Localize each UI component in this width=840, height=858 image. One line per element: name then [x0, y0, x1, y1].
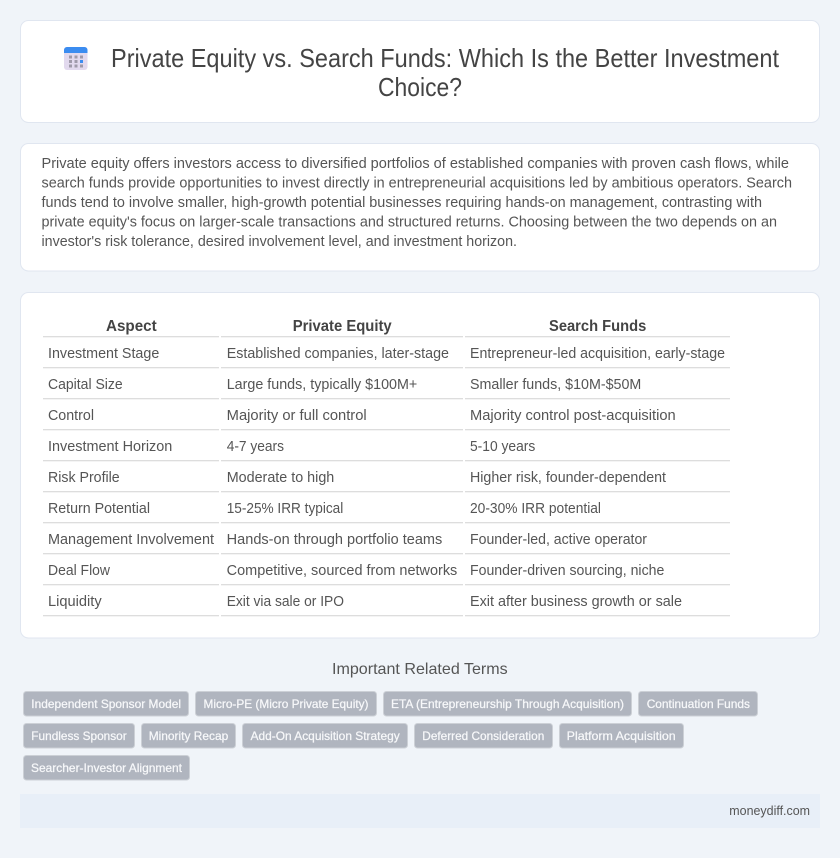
table row: capital size: Capital Size: [48, 377, 123, 393]
tag: fundless sponsor: [24, 724, 134, 748]
panel: title header: [20, 20, 820, 122]
table header row: [43, 318, 730, 337]
table row: investment stage: [43, 346, 730, 368]
footer: [20, 794, 820, 828]
table row: control: Control: [48, 408, 94, 424]
table row: investment stage: Established companies, later-stage: [227, 346, 449, 362]
table row: risk profile: Risk Profile: [48, 470, 120, 486]
tag: independent sponsor model: Independent Sponsor Model: [31, 697, 181, 711]
tag: fundless sponsor: Fundless Sponsor: [31, 729, 127, 743]
tag: add-on acquisition strategy: Add-On Acquisition Strategy: [250, 729, 400, 743]
icon: calendar: [64, 47, 88, 70]
table row: liquidity: Liquidity: [48, 594, 103, 610]
text block: introduction paragraph: search funds provide opportunities to invest directly in entrepreneurial acquisitions led by ambitious operators. Search: [42, 176, 792, 192]
tag: searcher-investor alignment: Searcher-Investor Alignment: [31, 761, 183, 775]
table row: investment horizon: [43, 439, 730, 461]
table row: investment stage: Investment Stage: [48, 346, 159, 362]
tag: platform acquisition: [560, 724, 684, 748]
table row: risk profile: [43, 470, 730, 492]
table row: investment horizon: 4-7 years: [227, 439, 284, 455]
table row: deal flow: Founder-driven sourcing, niche: [470, 563, 664, 579]
table row: risk profile: Higher risk, founder-dependent: [470, 470, 666, 486]
table row: control: [43, 408, 730, 430]
table header row: Private Equity: [293, 318, 392, 335]
table row: liquidity: Exit after business growth or sale: [470, 594, 682, 610]
tag: minority recap: [142, 724, 236, 748]
table row: control: Majority or full control: [227, 408, 367, 424]
tag: continuation funds: Continuation Funds: [647, 697, 750, 711]
tag: deferred consideration: [414, 724, 552, 748]
text block: introduction paragraph: [42, 156, 792, 250]
table row: investment stage: Entrepreneur-led acquisition, early-stage: [470, 346, 725, 362]
table row: liquidity: [43, 594, 730, 616]
table row: control: Majority control post-acquisition: [470, 408, 676, 424]
tag: micro-pe: [196, 692, 376, 716]
table row: deal flow: Deal Flow: [48, 563, 111, 579]
table row: management involvement: [43, 532, 730, 554]
text block: introduction paragraph: private equity's focus on larger-scale transactions and structured returns. Choosing between the two depends on an: [42, 214, 777, 230]
table row: return potential: 15-25% IRR typical: [227, 501, 343, 517]
tag: independent sponsor model: [24, 692, 188, 716]
table row: management involvement: Management Involvement: [48, 532, 214, 548]
text block: introduction paragraph: Private equity offers investors access to diversified portfolios of established companies with proven cash flows, while: [42, 156, 789, 172]
tag: deferred consideration: Deferred Consideration: [422, 729, 544, 743]
table row: return potential: Return Potential: [48, 501, 150, 517]
tag: searcher-investor alignment: [24, 756, 190, 780]
tag: continuation funds: [638, 692, 758, 716]
table row: return potential: 20-30% IRR potential: [470, 501, 601, 517]
related terms tags: [24, 692, 758, 780]
tag: eta: [384, 692, 632, 716]
title: Private Equity vs. Search Funds: Which Is the Better Investment: [111, 45, 779, 73]
panel: introduction: [20, 144, 820, 271]
table row: capital size: [43, 377, 730, 399]
title: Choice?: [378, 74, 462, 102]
table row: management involvement: Founder-led, active operator: [470, 532, 647, 548]
footer: moneydiff.com: [729, 803, 810, 818]
table row: liquidity: Exit via sale or IPO: [227, 594, 344, 610]
table row: risk profile: Moderate to high: [227, 470, 334, 486]
text block: introduction paragraph: investor's risk tolerance, desired involvement level, and investment horizon.: [42, 234, 517, 250]
table row: deal flow: Competitive, sourced from networks: [227, 563, 457, 579]
tag: platform acquisition: Platform Acquisition: [567, 729, 676, 743]
table header row: Aspect: [106, 318, 157, 335]
table row: investment horizon: 5-10 years: [470, 439, 535, 455]
table header row: Search Funds: [549, 318, 646, 335]
table row: investment horizon: Investment Horizon: [48, 439, 172, 455]
heading: important related terms: Important Related Terms: [332, 661, 508, 678]
title: [111, 45, 779, 102]
tag: eta: ETA (Entrepreneurship Through Acquisition): [391, 697, 624, 711]
table row: deal flow: [43, 563, 730, 585]
table row: return potential: [43, 501, 730, 523]
tag: add-on acquisition strategy: [242, 724, 408, 748]
table row: capital size: Smaller funds, $10M-$50M: [470, 377, 641, 393]
table row: management involvement: Hands-on through portfolio teams: [227, 532, 442, 548]
tag: minority recap: Minority Recap: [149, 729, 229, 743]
table row: capital size: Large funds, typically $100M+: [227, 377, 417, 393]
panel: comparison table: [20, 292, 820, 638]
tag: micro-pe: Micro-PE (Micro Private Equity): [204, 697, 368, 711]
text block: introduction paragraph: funds tend to involve smaller, high-growth potential businesses requiring hands-on management, contrasting with: [42, 195, 762, 211]
